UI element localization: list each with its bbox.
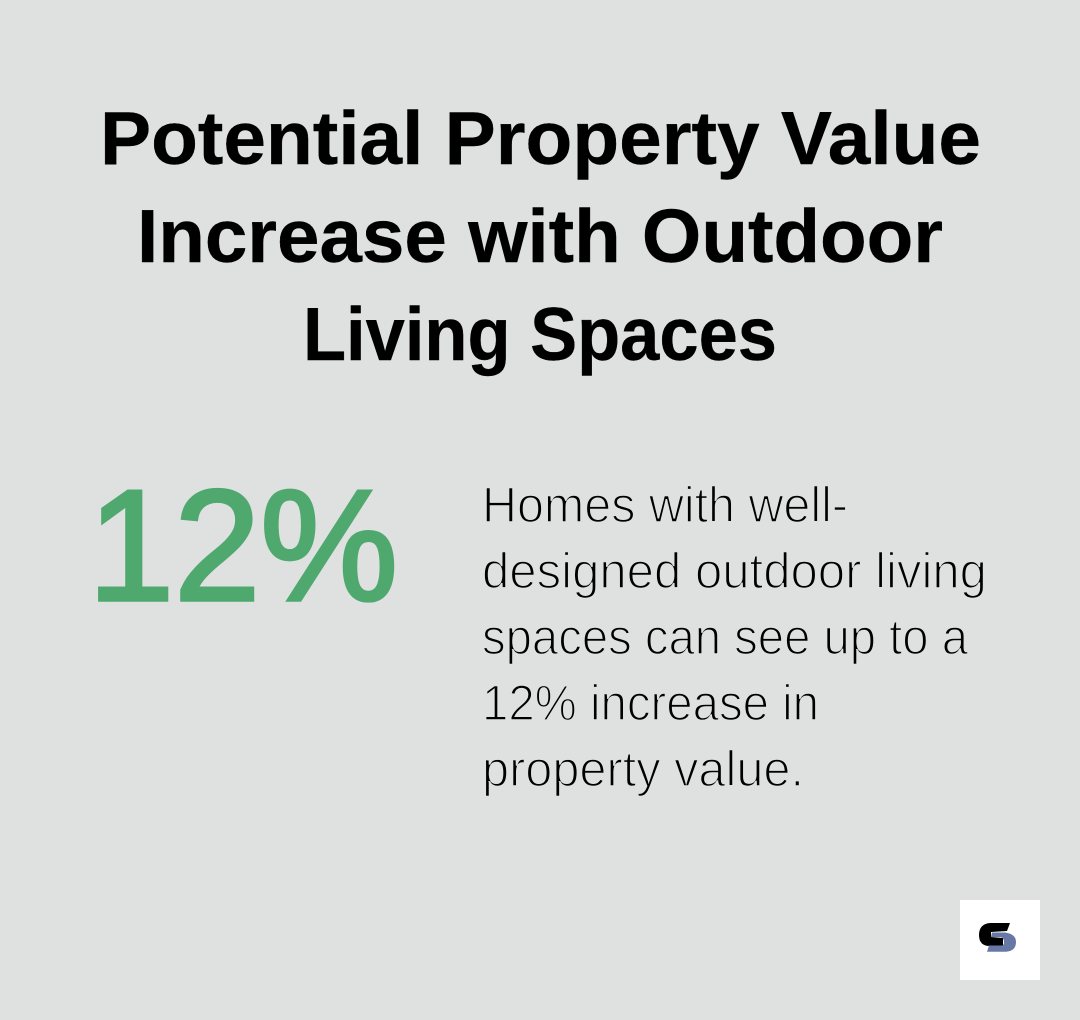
icon: logo mark (979, 923, 1016, 952)
title: Potential Property Value (100, 96, 981, 180)
description text: designed outdoor living (482, 543, 987, 599)
description text: spaces can see up to a (482, 609, 968, 665)
description text (482, 477, 987, 797)
statistic: 12%: 12% (88, 458, 398, 634)
logo badge (960, 900, 1040, 980)
title (100, 96, 981, 376)
title: Living Spaces (303, 292, 777, 376)
title: Increase with Outdoor (137, 194, 943, 278)
description text: 12% increase in (482, 675, 819, 731)
description text: Homes with well- (482, 477, 848, 533)
description text: property value. (482, 741, 804, 797)
